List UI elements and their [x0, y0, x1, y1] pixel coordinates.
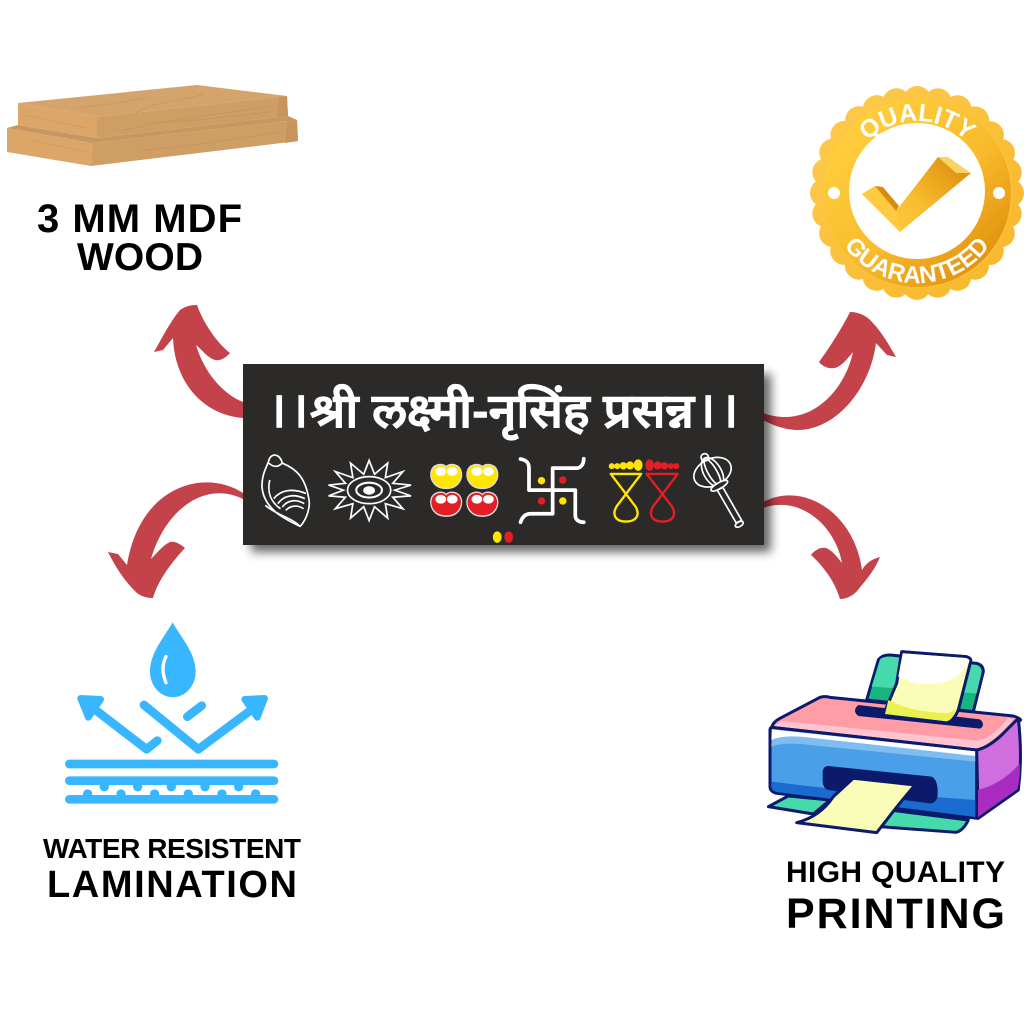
symbol: sun	[329, 460, 411, 521]
label: high quality printing	[786, 856, 1005, 938]
card shadow	[251, 374, 771, 552]
nameplate card	[243, 364, 764, 545]
icon: wooden planks	[7, 85, 298, 166]
icon: quality guaranteed badge: GUARANTEED	[847, 238, 986, 284]
label: high quality printing: HIGH QUALITY	[786, 856, 1005, 889]
decorative dots	[493, 531, 513, 543]
nameplate symbols	[262, 452, 744, 543]
symbol: yellow and red kumkum marks	[431, 464, 498, 516]
nameplate heading: श्री लक्ष्मी-नृसिंह प्रसन्न	[310, 384, 696, 441]
label: 3 mm mdf wood: 3 MM MDF	[37, 197, 242, 241]
icon: water drop and lamination	[69, 622, 274, 799]
arrow: bottom-right to printing	[763, 495, 880, 599]
nameplate heading: ।	[697, 382, 715, 438]
label: water resistent lamination: WATER RESISTENT	[43, 833, 301, 864]
symbol: red footprint	[645, 459, 679, 522]
nameplate heading	[268, 382, 738, 441]
symbol: conch	[262, 455, 309, 526]
label: 3 mm mdf wood	[37, 197, 242, 279]
symbol: mace	[689, 452, 744, 529]
icon: quality guaranteed badge	[810, 86, 1024, 300]
label: 3 mm mdf wood: WOOD	[77, 236, 203, 279]
label: water resistent lamination	[43, 833, 301, 906]
icon: quality guaranteed badge: QUALITY	[860, 104, 977, 137]
symbol: swastika	[521, 459, 584, 522]
symbol: yellow footprint	[609, 459, 643, 522]
icon: printer	[768, 652, 1021, 833]
label: high quality printing: PRINTING	[786, 890, 1005, 938]
nameplate heading: ।	[268, 382, 286, 438]
arrow: top-left to wood	[154, 305, 243, 418]
nameplate heading: ।	[720, 382, 738, 438]
label: water resistent lamination: LAMINATION	[47, 864, 297, 906]
arrow: top-right to quality badge	[763, 312, 896, 430]
nameplate heading: ।	[290, 382, 308, 438]
arrow: bottom-left to lamination	[108, 482, 243, 598]
